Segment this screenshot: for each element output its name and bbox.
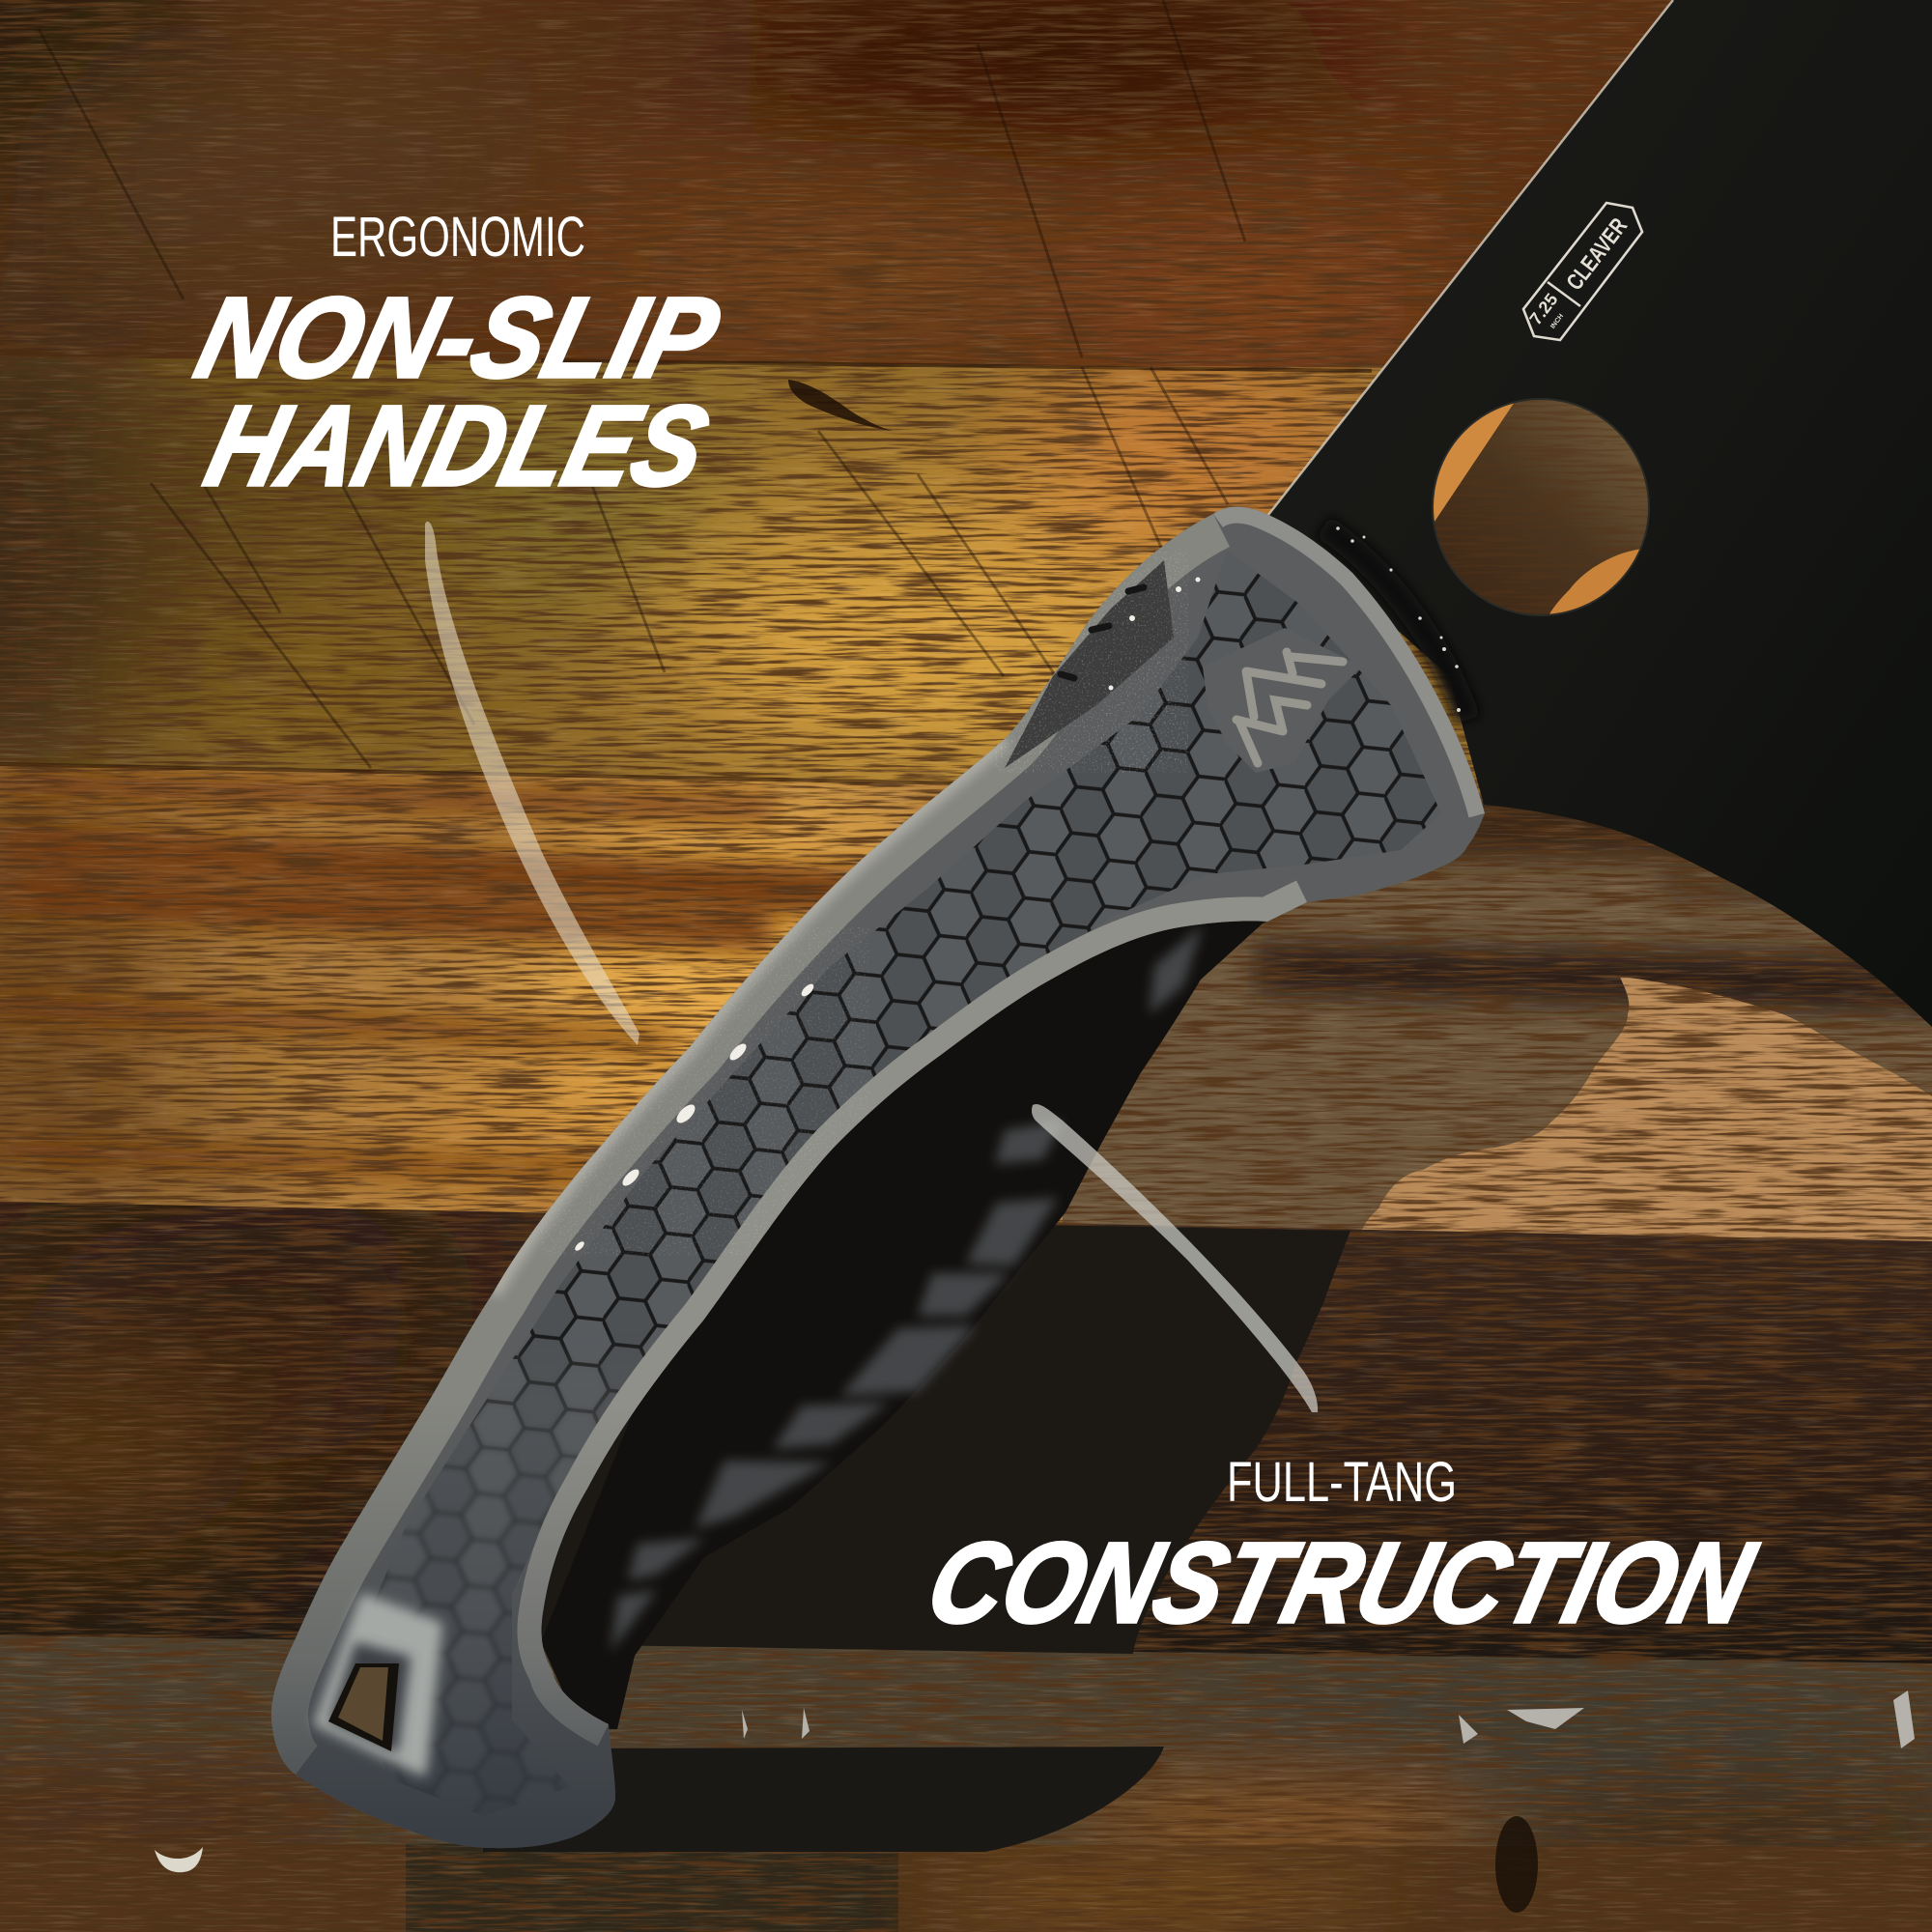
- thumb panel: [995, 551, 1188, 773]
- eyebrow: ergonomic: ERGONOMIC: [330, 206, 585, 269]
- size badge: [1523, 203, 1642, 340]
- plank: bottom: [0, 1835, 1932, 1932]
- wet speckles: [574, 578, 1200, 1252]
- size badge: CLEAVER: [1562, 213, 1633, 296]
- plank: shaded tan area under blade: [1063, 802, 1932, 1246]
- rim highlight: [493, 739, 1005, 1293]
- handle: [242, 483, 1517, 1884]
- blade: [1268, 0, 1932, 1027]
- cast shadow: under handle: [483, 1747, 1164, 1852]
- headline: non-slip: NON-SLIP: [185, 275, 730, 402]
- plank: top: [0, 0, 1673, 368]
- eyebrow: full-tang: FULL-TANG: [1227, 1451, 1457, 1514]
- lower end shading: [242, 1401, 676, 1884]
- scratches: [39, 0, 1245, 768]
- heading: full-tang construction: [917, 1451, 1766, 1647]
- logo: [1236, 652, 1343, 763]
- inner rim band: [541, 902, 1307, 1724]
- plank seams: [0, 360, 1372, 783]
- plank: lower dark: [0, 1198, 1932, 1681]
- logo patch: [1203, 628, 1362, 773]
- dark grain bands: [0, 773, 869, 1186]
- dark tang grip: [541, 902, 1307, 1729]
- grip ridge highlights: [611, 925, 1203, 1652]
- wood chips: [155, 1847, 203, 1872]
- gouge: [788, 380, 892, 431]
- blade cutout hole: [1430, 396, 1652, 618]
- cast shadow: blade and handle: [541, 1217, 1350, 1654]
- plank: upper golden: [0, 357, 1480, 792]
- plank: middle striped: [0, 734, 1932, 1256]
- headline: construction: CONSTRUCTION: [917, 1520, 1766, 1647]
- shadow cutout: lit wood: [1362, 977, 1932, 1256]
- callout line: handles: [425, 522, 639, 1045]
- size badge: INCH: [1549, 313, 1565, 330]
- knot: [1495, 1816, 1538, 1913]
- lanyard hole: [319, 1599, 438, 1771]
- guard rim: [1213, 507, 1485, 813]
- callout line: construction: [1032, 1104, 1318, 1412]
- heading: ergonomic non-slip handles: [185, 206, 730, 510]
- guard speckle: [1323, 526, 1468, 720]
- blade spine highlight: [1268, 0, 1673, 515]
- size badge: 7.25: [1525, 290, 1562, 328]
- honeycomb grip: [242, 483, 1517, 1884]
- plank: grey-brown: [0, 1633, 1932, 1884]
- headline: handles: HANDLES: [195, 384, 719, 510]
- outer rim band: [271, 514, 1213, 1775]
